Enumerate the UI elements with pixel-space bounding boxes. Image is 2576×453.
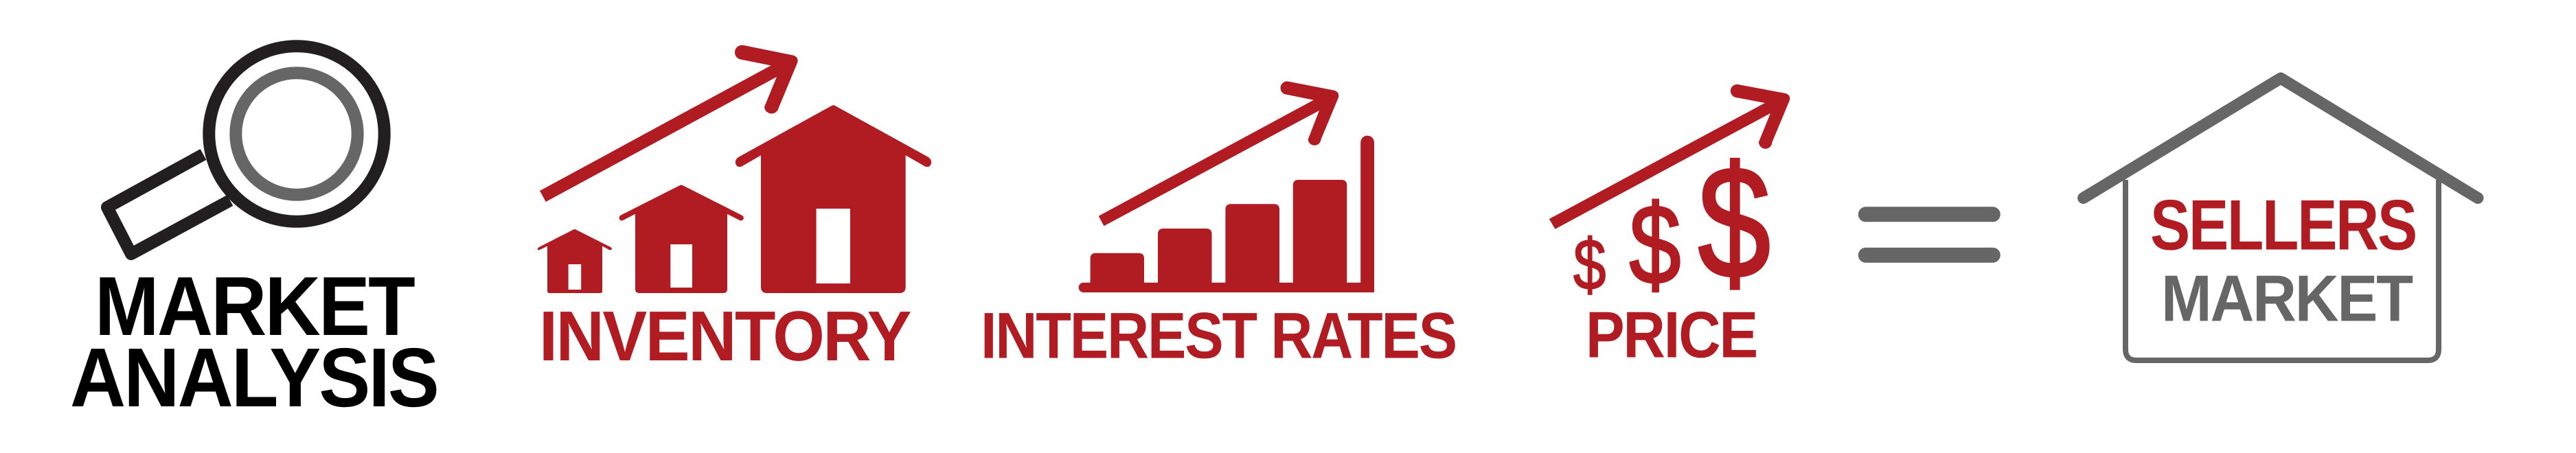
label: market: MARKET <box>2161 262 2413 335</box>
label: price: PRICE <box>1586 299 1757 372</box>
heading: market analysis: MARKET <box>95 259 415 353</box>
panel: market analysis <box>70 46 437 424</box>
icon: medium house <box>619 185 744 293</box>
panel: sellers market <box>2084 78 2478 360</box>
heading: market analysis: ANALYSIS <box>70 331 437 424</box>
icon: dollar signs <box>1573 133 1770 312</box>
bar chart: rising bars with axes <box>1079 136 1374 292</box>
icon: dollar signs: $ <box>1573 225 1606 305</box>
panel: interest rates <box>981 81 1456 373</box>
icon: large house <box>736 105 931 293</box>
label: sellers: SELLERS <box>2150 185 2416 265</box>
label: interest rates: INTEREST RATES <box>981 300 1456 373</box>
panel: inventory <box>538 45 931 375</box>
icon: equals sign <box>1858 207 2001 263</box>
arrow: price rising <box>1549 84 1790 229</box>
icon: small house <box>538 229 612 293</box>
panel: price <box>1549 84 1790 372</box>
arrow: inventory rising <box>540 45 798 202</box>
heading: market analysis <box>70 259 437 424</box>
arrow: interest rates rising <box>1099 81 1338 226</box>
label: inventory: INVENTORY <box>539 297 911 375</box>
icon: dollar signs: $ <box>1698 133 1770 312</box>
icon: dollar signs: $ <box>1629 181 1681 307</box>
icon: house outline <box>2084 78 2478 360</box>
icon: magnifying glass <box>107 46 385 254</box>
